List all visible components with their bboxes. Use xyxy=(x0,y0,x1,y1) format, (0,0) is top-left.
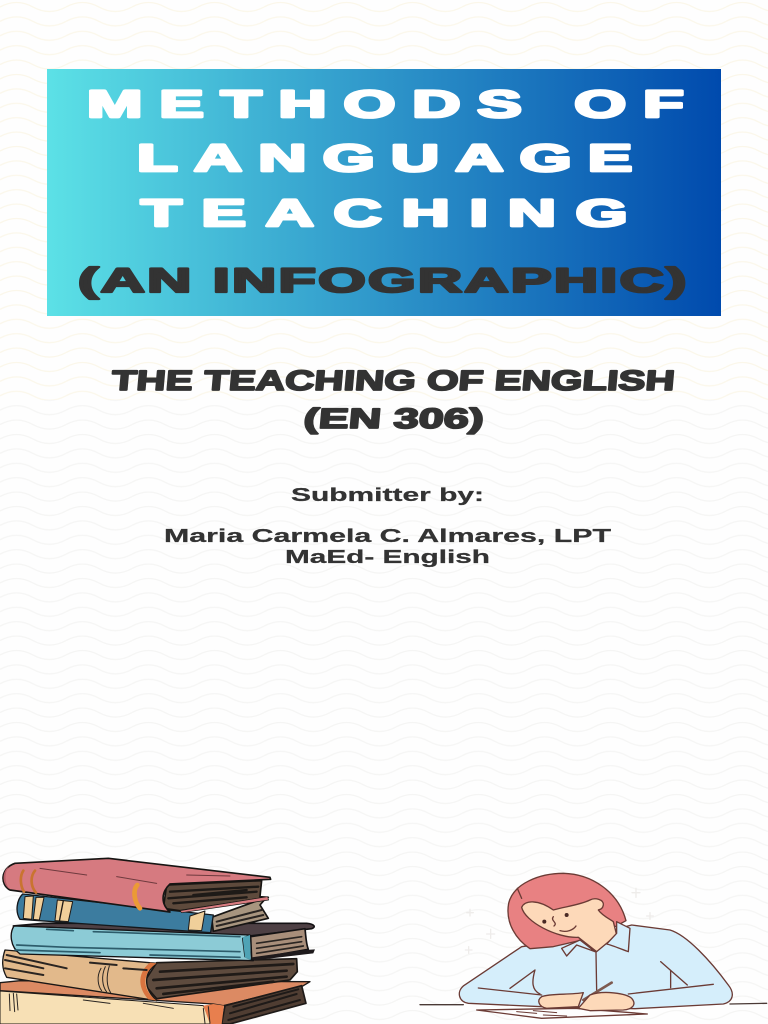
text block: submitter xyxy=(164,485,611,567)
book 3 xyxy=(11,923,315,961)
book 1 xyxy=(3,858,271,913)
icon: stack of books xyxy=(0,858,315,1024)
heading: course name: THE TEACHING OF ENGLISH xyxy=(110,365,676,396)
text block: submitter: MaEd- English xyxy=(285,547,490,567)
title line: METHODS OF: METHODS OF xyxy=(87,83,684,125)
arm details xyxy=(478,952,713,995)
sparkles xyxy=(465,888,653,953)
shirt xyxy=(459,925,732,1009)
hair xyxy=(508,873,626,949)
book 2 xyxy=(17,894,268,933)
hands and paper xyxy=(477,983,647,1018)
face and neck xyxy=(522,899,617,952)
eyes and mouth xyxy=(542,913,576,931)
heading: course name xyxy=(110,365,676,434)
title line: LANGUAGE: LANGUAGE xyxy=(137,137,632,179)
text block: submitter: Submitter by: xyxy=(291,485,484,505)
subtitle: an infographic: (AN INFOGRAPHIC) xyxy=(78,262,686,300)
heading: course name: (EN 306) xyxy=(302,403,485,434)
panel: title banner xyxy=(47,69,721,316)
text block: submitter: Maria Carmela C. Almares, LPT xyxy=(164,526,611,546)
title line: TEACHING: TEACHING xyxy=(141,192,628,234)
collar xyxy=(562,922,630,956)
book 4 xyxy=(3,950,297,1001)
book 5 xyxy=(0,981,310,1024)
illustration: woman writing at desk xyxy=(420,873,767,1018)
desk line xyxy=(420,1003,767,1005)
